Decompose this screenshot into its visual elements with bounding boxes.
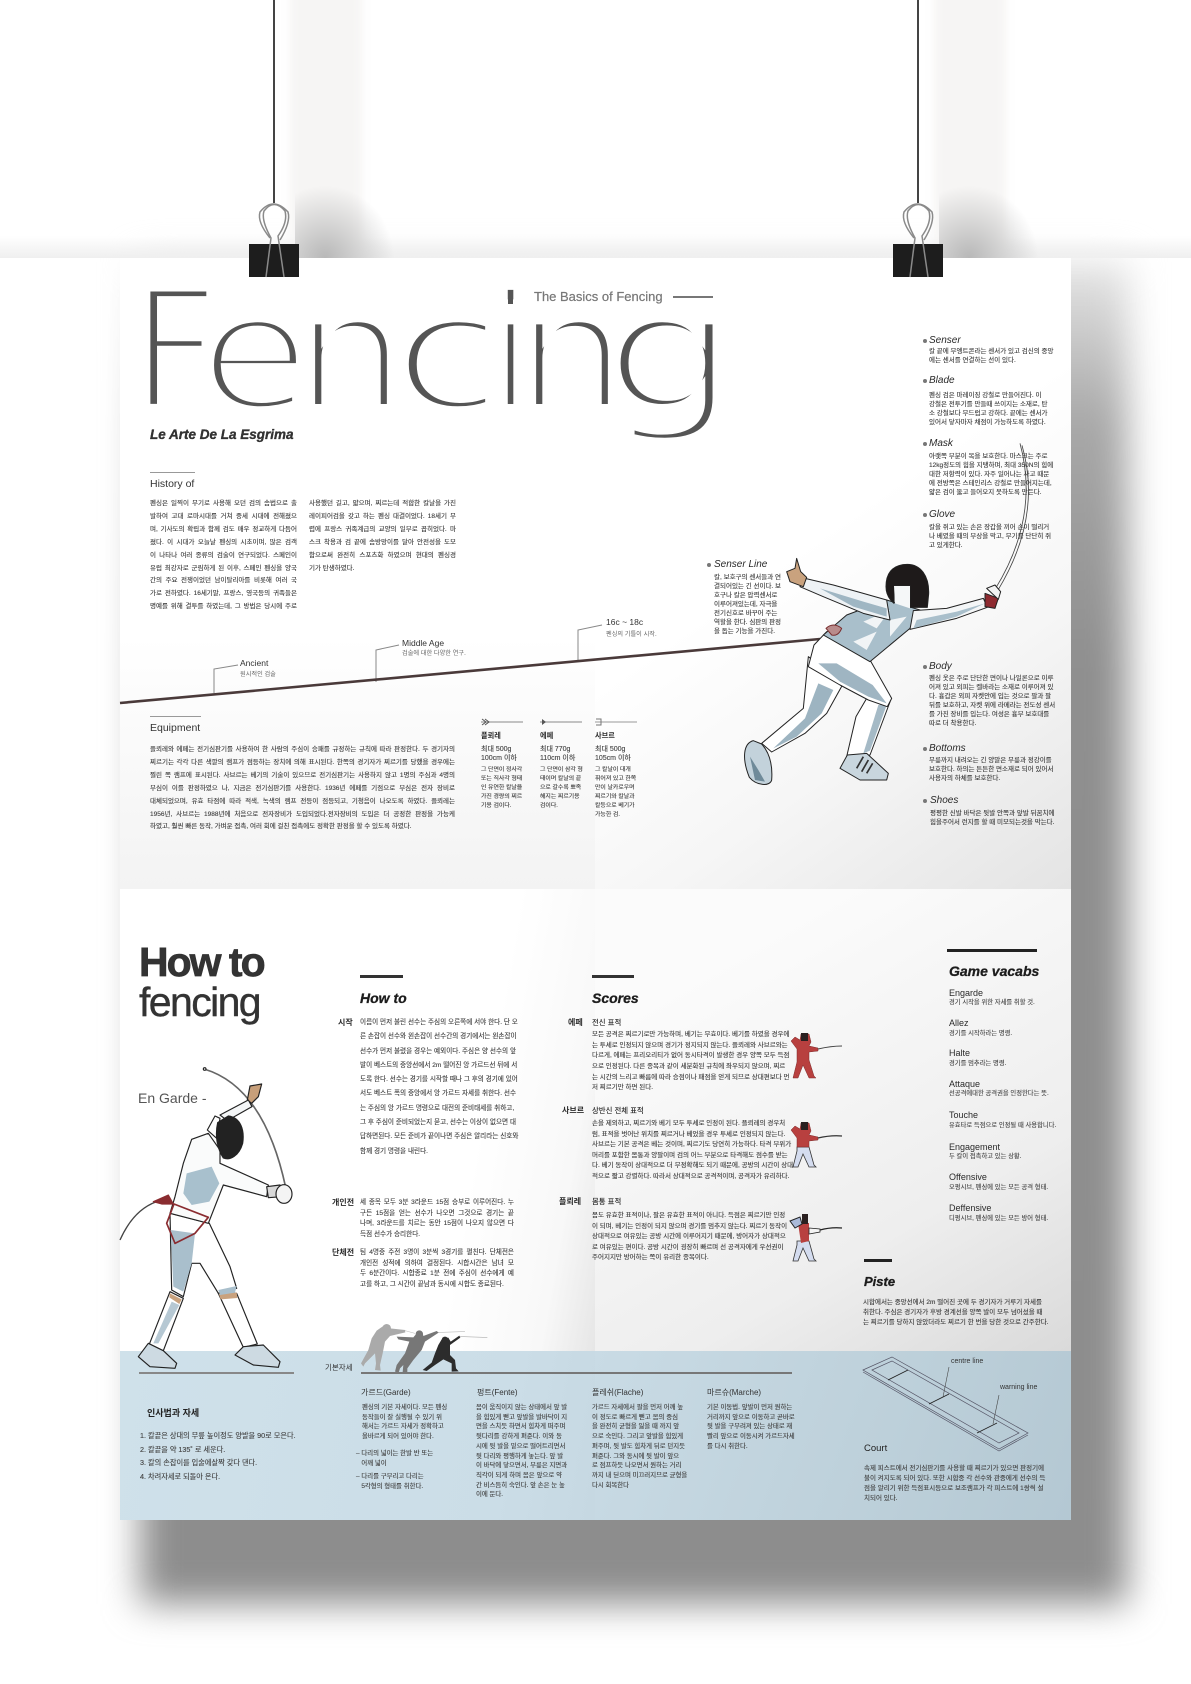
section: equipment: 찌르기는 각각 다른 색깔의 램프가 점등하는 장치에 의해 표시된다. 한쪽의 경기자가 찌르기를 당했을 경우에는	[150, 759, 455, 766]
stance: marche: 거리까지 앞으로 이동하고 곧바로	[707, 1414, 795, 1421]
equipment note: shoes	[923, 795, 1054, 826]
section: equipment: 하였고, 훨씬 빠른 동작, 가벼운 접촉, 여러 회에 걸친 접촉에도 정확한 판정을 할 수 있도록 하였다.	[150, 823, 412, 830]
section: history: 유럽 최강자로 군림하게 된 이후, 스페인 펜싱을 양국	[150, 565, 297, 572]
stance: fleche: 으로 숙인다. 그리고 앞발을 힘있게	[592, 1433, 683, 1440]
section: how to: 발이 베스트의 중앙선에서 2m 떨어진 앙 가르드선 뒤에 서	[360, 1062, 517, 1069]
equipment: foil	[481, 718, 523, 809]
equipment: sabre: 칼등으로 베기가	[595, 803, 635, 809]
equipment note: body: Body	[929, 661, 952, 672]
silhouettes: basic stances	[361, 1324, 488, 1372]
equipment note: senser: 에는 센서를 연결하는 선이 있다.	[929, 357, 1016, 364]
section: court	[864, 1443, 1046, 1502]
left arm	[800, 578, 890, 620]
equipment note: senser line: Senser Line	[714, 559, 767, 570]
fencer illustration: en garde	[119, 1067, 293, 1369]
section: piste: Piste	[864, 1274, 895, 1289]
stance: fente	[476, 1388, 567, 1498]
section: history	[150, 472, 456, 610]
timeline label: 16c-18c	[606, 617, 657, 638]
section: game vocabulary: Touche	[949, 1110, 978, 1120]
equipment: foil: 그 단면이 정사각	[481, 767, 522, 773]
stance: garde: 5각형의 형태를 취한다.	[361, 1483, 423, 1490]
section: how to: How to	[360, 990, 407, 1006]
hanging string right	[917, 0, 919, 203]
section: court: 치되어 있다.	[864, 1495, 898, 1502]
title: Fencing	[131, 254, 738, 448]
section: scores: 로 여유있는 편이다. 공방 시간이 굉장히 빠르며 선 공격자에게 우선권이	[592, 1244, 783, 1250]
stance: fente: 시에 뒷 발을 밑으로 떨어트리면서	[476, 1443, 565, 1450]
stance: fente: 뒷다리를 강하게 펴준다. 이와 동	[476, 1433, 562, 1440]
equipment note: senser: Senser	[929, 335, 961, 346]
stance: fleche: 펴주며, 뒷 발도 힘차게 뒤로 던지듯	[592, 1443, 685, 1450]
section: scores: 주어지지만 방어하는 쪽이 유리한 종목이다.	[592, 1254, 709, 1261]
equipment: sabre	[595, 718, 637, 818]
equipment: epee	[540, 719, 583, 809]
front shin	[847, 698, 891, 757]
stance: garde: 가르드(Garde)	[361, 1388, 411, 1397]
equipment: foil: 100cm 이하	[481, 755, 517, 762]
equipment note: blade: 펜싱 검은 마레이징 강철로 만들어진다. 이	[929, 392, 1042, 399]
piste court diagram	[862, 1356, 1028, 1452]
stance: fleche	[592, 1388, 687, 1489]
stance: fleche: 펴준다. 그와 동시에 뒷 발이 앞으	[592, 1453, 679, 1460]
thigh	[808, 632, 892, 707]
section: history: History of	[150, 478, 194, 490]
timeline label: middle age	[402, 638, 466, 657]
glove	[985, 593, 998, 608]
stance: garde: 펜싱의 기본 자세이다. 모든 펜싱	[362, 1404, 447, 1411]
equipment note: senser line	[707, 559, 781, 635]
tagline: Le Arte De La Esgrima	[150, 427, 294, 442]
section: scores: 이 되며, 베기는 인정이 되지 않으며 경기를 멈추지 않는다. 찌르기 동작이	[592, 1222, 787, 1230]
subtitle: The Basics of Fencing: The Basics of Fencing	[534, 289, 663, 304]
stance: fleche: 을 완전히 균형을 잃을 때 까지 앞	[592, 1423, 679, 1430]
section: equipment: 대체되었으며, 유효 타점에 따라 적색, 녹색의 램프 전등이 점등되고, 기청음이 나오도록 하였다. 플뢰레는	[150, 798, 455, 805]
title: Fencing: c	[392, 259, 503, 447]
hand	[787, 558, 807, 587]
stance: fleche: 로 점프하듯 나오면서 원하는 거리	[592, 1462, 681, 1469]
section: game vocabulary: Halte	[949, 1048, 970, 1058]
section: history: 가로 전하였다. 16세기말, 프랑스, 영국등의 귀족들은	[150, 590, 297, 597]
section: history: 간의 주요 전쟁이었던 남이탈리아를 비롯해 여러 국	[150, 577, 297, 584]
section: court: Court	[864, 1443, 887, 1454]
timeline label: middle age: Middle Age	[402, 638, 444, 648]
section: game vocabulary: 디펑시브, 펜싱에 있는 모든 방어 형태.	[949, 1215, 1048, 1222]
equipment note: senser line: 칼, 보호구의 센서들과 연	[714, 574, 781, 581]
section: game vocabulary: 경기 시작을 위한 자세를 취할 것.	[949, 999, 1035, 1006]
stance: fente: 뒷 다리와 평행하게 놓는다. 앞 발	[476, 1453, 563, 1460]
section: scores: 상대적으로 여유있는 공방 시간에 이루어지기 때문에, 방어자가 상대적으	[592, 1233, 786, 1240]
section: history: 사용했던 길고, 얇으며, 찌르는데 적합한 칼날을 가진	[309, 500, 456, 507]
small fencer: epee target	[790, 1033, 842, 1078]
section: how to: 개인전 성적에 의하여 결정된다. 시합시간은 남녀 모	[360, 1260, 514, 1266]
poster background panels	[120, 258, 1071, 1520]
equipment note: senser: 칼 끝에 무엥트콘라는 센서가 있고 검신의 중앙	[929, 348, 1053, 355]
section: equipment: 부심이 이를 판정하였으 나, 지금은 전기심판기를 사용한다. 1936년 에페를 기점으로 부심은 전자 장비로	[150, 785, 455, 792]
greeting and posture: 2. 칼끝을 약 135˚ 로 세운다.	[140, 1445, 225, 1454]
section: game vocabulary: Offensive	[949, 1172, 987, 1182]
stance: fleche: 까지 내 딛으며 미끄러지므로 균형을	[592, 1472, 687, 1479]
back foot	[745, 741, 772, 784]
equipment: epee: 태이며 칼날의 끝	[540, 776, 581, 782]
section: scores: 전신 표적	[592, 1018, 621, 1027]
title: Fencing: i	[488, 260, 533, 448]
equipment: epee: 최대 770g	[540, 746, 570, 753]
stance: fente: 간 비스듬히 숙인다. 앞 손은 눈 높	[476, 1482, 565, 1489]
stance: fente: 면을 스치듯 하면서 힘차게 떠주며	[476, 1423, 565, 1430]
section: how to: 선수가 먼저 불렸을 경우는 예외이다. 주심은 양 선수의 앞	[360, 1048, 516, 1055]
equipment note: blade: 소 강철보다 무드럽고 강하다. 끝에는 센서가	[929, 410, 1047, 417]
section: scores	[559, 975, 793, 1261]
stance: fente: 몸이 움직이지 않는 상태에서 앞 발	[476, 1404, 567, 1411]
stance: marche: 마르슈(Marche)	[707, 1388, 761, 1397]
timeline label: 16c-18c: 16c ~ 18c	[606, 617, 643, 627]
label: centre line: centre line	[951, 1358, 983, 1365]
equipment note: shoes: Shoes	[930, 795, 958, 806]
equipment: foil: 플뢰레	[481, 731, 501, 740]
stance: fente: 펑트(Fente)	[477, 1388, 518, 1397]
equipment note: senser line: 결되어있는 긴 선이다. 보	[714, 583, 781, 590]
title: Fencing: F	[131, 254, 220, 448]
section: scores: 상반신 전체 표적	[592, 1106, 644, 1115]
equipment note: body	[923, 661, 1055, 727]
label: basic stances: 기본자세	[325, 1363, 353, 1372]
stance: fente: 직각이 되게 하며 몸은 앞으로 약	[476, 1472, 562, 1479]
section: how to	[332, 975, 518, 1288]
equipment note: mask: 아랫쪽 부분이 목을 보호한다. 마스크는 주로	[929, 453, 1047, 460]
section: scores: 사브르는 기본 공격은 베는 것이며, 찌르기도 당연히 가능하다. 타격 부위가	[592, 1141, 791, 1148]
equipment: foil: 또는 직사각 형태	[481, 776, 522, 782]
equipment: sabre: 휘어져 있고 한쪽	[595, 776, 636, 782]
section: history: 발하여 고대 로마시대를 거쳐 중세 시대에 전해졌으	[150, 513, 297, 520]
section: scores: 손을 제외하고, 찌르기와 베기 모두 투셰로 인정이 된다. 플뢰레의 경우처	[592, 1120, 785, 1127]
poster shadow	[140, 262, 1128, 1604]
equipment: sabre: 찌르기와 칼날과	[595, 794, 635, 800]
section: how to: 그 후 주심이 준비되었는지 묻고, 선수는 이상이 없으면 대	[360, 1119, 516, 1126]
mask	[886, 564, 929, 607]
timeline label: ancient: 원시적인 검술	[240, 671, 276, 678]
stance: marche: 기본 이동법. 앞발이 먼저 원하는	[707, 1404, 792, 1411]
section: scores: 머리를 포함한 몸통과 양팔이며 검의 어느 부분으로 타격해도 점수를 받는	[592, 1152, 788, 1159]
section: game vocabulary: Engarde	[949, 988, 983, 998]
heading: How to fencing: fencing	[139, 979, 260, 1025]
equipment note: shoes: 힘을주어서 런지를 할 때 미모되는것을 막는다.	[930, 819, 1054, 826]
hanging shadow left	[290, 0, 362, 258]
fencer illustration: lunge	[744, 443, 1029, 785]
section: equipment: 1956년, 사브르는 1988년에 처음으로 전자장비가 도입되었다.전자장비의 도입은 더 공정한 판정을 가능케	[150, 811, 455, 818]
hanging string left	[273, 0, 275, 203]
equipment: sabre: 105cm 이하	[595, 755, 631, 762]
section: how to: 도록 한다. 선수는 경기를 시작할 때나 그 후의 경기에 있어	[360, 1076, 518, 1083]
stance: garde: 어깨 넓이	[361, 1460, 387, 1467]
section: history: 레이피어검을 갖고 하는 펜싱 대결이었다. 18세기 무	[309, 513, 456, 520]
section: how to: 두 6분간이다. 시합종료 1분 전에 주심이 선수에게 예	[360, 1270, 514, 1277]
section: how to: 이름이 먼저 불린 선수는 주심의 오른쪽에 서야 한다. 단 오	[360, 1019, 518, 1026]
section: how to: 구든 15점을 얻는 선수가 나오면 그것으로 경기는 끝	[360, 1210, 514, 1217]
section: how to: 세 종목 모두 3분 3라운드 15점 승부로 이루어진다. 누	[360, 1199, 514, 1206]
section: how to: 팀 4명중 주전 3명이 3분씩 3경기를 펼친다. 단체전은	[360, 1249, 514, 1256]
section: scores: 다. 베기 동작이 상대적으로 더 무정확해도 되기 때문에, 공방의 시간이 상대	[592, 1162, 793, 1169]
equipment note: mask: 12kg정도의 힘을 지탱하며, 최대 350N의 힘에	[929, 462, 1053, 469]
section: history: 스크 착용과 검 끝에 솜방망이를 달아 안전성을 도모	[309, 539, 456, 546]
equipment note: senser	[923, 335, 1054, 364]
section: game vocabulary: 경기를 멈추라는 명령.	[949, 1060, 1006, 1067]
section: game vocabulary: Game vacabs	[949, 963, 1039, 979]
section: piste: 는 찌르기를 당하지 않았더라도 찌르기 한 번을 당한 것으로 간주한다.	[863, 1319, 1048, 1326]
section: court: 불이 켜지도록 되어 있다. 또한 시합중 각 선수와 관중에게 선수의 득	[864, 1475, 1045, 1482]
equipment note: bottoms	[923, 743, 1053, 782]
small fencer: sabre target	[790, 1122, 842, 1168]
section: history: 렵에 프랑스 귀족계급의 교양의 일부로 꼽히었다. 마	[309, 526, 456, 533]
equipment note: body: 따로 더 착용한다.	[929, 720, 976, 727]
section: how to: 개인전	[332, 1198, 354, 1207]
section: equipment: 플뢰레와 에페는 전기심판기를 사용하여 한 사람의 주심이 승패를 규정하는 규칙에 따라 판정한다. 두 경기자의	[150, 746, 455, 753]
section: how to: 고를 하고, 그 시간이 끝남과 동시에 시합도 종료된다.	[360, 1280, 504, 1288]
equipment note: senser line: 호구나 칼은 압력센서로	[714, 592, 777, 599]
heading: How to fencing: How to	[139, 939, 264, 985]
section: game vocabulary: 경기를 시작하라는 명령.	[949, 1030, 1012, 1037]
binder clip left	[249, 203, 299, 278]
equipment note: bottoms: 보호한다. 하의는 튼튼한 면소재로 되어 있어서	[929, 766, 1053, 773]
timeline label: ancient: Ancient	[240, 658, 268, 668]
connector	[826, 625, 842, 635]
equipment: epee: 해지는 찌르기용	[540, 794, 580, 800]
stance: garde: 해서는 가르드 자세가 정확하고	[362, 1423, 444, 1430]
equipment note: bottoms: 사용자의 하체를 보호한다.	[929, 775, 1000, 782]
equipment: sabre: 가능한 검.	[595, 812, 620, 818]
section: history: 졌다. 이 시대가 오늘날 펜싱의 시초이며, 많은 검객	[150, 539, 297, 546]
section: equipment: Equipment	[150, 722, 200, 734]
stance: fente: 이 바닥에 닿으면서, 무릎은 지면과	[476, 1462, 567, 1469]
section: game vocabulary: Attaque	[949, 1079, 980, 1089]
label: warning line: warning line	[1000, 1384, 1037, 1391]
ground line	[139, 1372, 294, 1374]
section: history: 함으로써 완전히 스포츠화 하였으며 현대의 펜싱경	[309, 552, 456, 559]
title: Fencing: g	[603, 258, 738, 447]
stance: fleche: 가르드 자세에서 팔을 먼저 어깨 높	[592, 1404, 683, 1411]
section: equipment	[150, 716, 455, 830]
equipment: sabre: 최대 500g	[595, 746, 625, 753]
stance: marche: 를 다시 취한다.	[707, 1443, 748, 1450]
section: scores: 다르게, 에페는 프리오리티가 없어 동시타격이 발생한 경우 양쪽 모두 득점	[592, 1052, 789, 1059]
section: scores: 는 투셰로 인정되지 않으며 경기가 정지되지 않는다. 플뢰레와 사브르와는	[592, 1042, 788, 1049]
section: scores: 사브르	[562, 1106, 584, 1115]
jacket	[823, 600, 920, 662]
equipment note: mask: 에 전방쪽은 스테인리스 강철로 만들어지는데,	[929, 480, 1052, 487]
equipment: epee: 110cm 이하	[540, 755, 575, 762]
equipment note: glove: 고 있게한다.	[929, 542, 963, 549]
section: how to: 시작	[338, 1018, 353, 1027]
section: how to: 는 주심의 앙 가르드 명령으로 대전의 준비태세를 취하고,	[360, 1105, 514, 1112]
stance: fente: 을 힘있게 뻗고 앞발을 발바닥이 지	[476, 1414, 567, 1421]
section: piste: 취한다. 주심은 경기자가 후방 경계선을 양쪽 발이 모두 넘어섰을 때	[863, 1309, 1043, 1316]
front foot	[840, 753, 888, 780]
section: court: 속제 피스트에서 전기심판기를 사용할 때 찌르기가 있으면 판정기에	[864, 1465, 1044, 1472]
equipment: sabre: 만이 날카로우며	[595, 785, 635, 791]
equipment note: senser line: 이루어져있는데, 자극을	[714, 601, 777, 608]
section: game vocabulary: 유효타로 득점으로 인정될 때 사용합니다.	[949, 1122, 1056, 1129]
title: Fencing: e	[199, 258, 311, 447]
timeline	[120, 624, 820, 704]
stance: marche	[707, 1388, 795, 1450]
equipment note: body: 를 가진 장비를 입는다. 여성은 흉부 보호대를	[929, 711, 1049, 718]
equipment note: glove	[923, 509, 1051, 549]
equipment: epee: 에페	[540, 731, 553, 740]
section: scores: 는 시간의 느리고 빠름에 따라 승점이나 패점을 얻게 되므로 상대편보다 먼	[592, 1074, 789, 1081]
equipment note: mask: 대한 저항력이 있다. 자주 일어나는 사고 때문	[929, 471, 1049, 478]
basic stance rule	[361, 1372, 792, 1374]
title: Fencing: n	[294, 259, 407, 448]
equipment note: blade: Blade	[929, 375, 955, 386]
stance: garde: – 다리를 구부리고 다리는	[356, 1473, 424, 1480]
stance: garde: – 다리의 넓이는 한발 반 또는	[356, 1450, 433, 1457]
section: history: 이 나타나 여러 종류의 검술이 연구되었다. 스페인이	[150, 552, 297, 559]
blade	[995, 443, 1029, 591]
equipment: epee: 그 단면이 삼각 형	[540, 767, 583, 773]
greeting and posture: 인사법과 자세	[147, 1408, 199, 1418]
section: how to: 단체전	[332, 1248, 354, 1257]
section: game vocabulary: 오펑시브, 펜싱에 있는 모든 공격 형태.	[949, 1184, 1048, 1191]
section: how to: 답하면된다. 모든 준비가 끝이나면 주심은 알리라는 신호와	[360, 1133, 518, 1140]
section: scores: 모든 공격은 찌르기로만 가능하며, 베기는 무효이다. 베기를 하였을 경우에	[592, 1031, 789, 1038]
timeline label: 16c-18c: 펜싱의 기틀이 시작.	[606, 631, 657, 638]
greeting and posture: 3. 칼의 손잡이를 입술에살짝 갖다 댄다.	[140, 1458, 257, 1467]
equipment note: body: 어져 있고 외피는 켈바라는 소재로 이루어져 있	[929, 684, 1053, 691]
stance: marche: 빨리 앞으로 이동시켜 가르드자세	[707, 1433, 795, 1440]
section: how to: 득점 선수가 승리한다.	[360, 1231, 420, 1238]
equipment note: senser line: 역할을 한다. 심판의 판정	[714, 619, 781, 626]
section: game vocabulary: Engagement	[949, 1142, 1000, 1152]
top edge shadow	[0, 236, 1191, 258]
section: how to: 함께 경기 명령을 내린다.	[360, 1148, 428, 1155]
section: scores: 몸도 유효한 표적이나, 팔은 유효한 표적이 아니다. 득점은 찌르기만 인정	[592, 1212, 785, 1219]
equipment note: bottoms: 무릎까지 내려오는 긴 양말은 무릎과 정강이를	[929, 757, 1052, 764]
section: piste: 시합에서는 중앙선에서 2m 떨어진 곳에 두 경기자가 거루기 자세를	[863, 1299, 1042, 1306]
section: how to: 서도 베스트 폭의 중앙에서 앙 가르드 자세를 취한다. 선수	[360, 1090, 516, 1097]
equipment note: glove: Glove	[929, 509, 955, 520]
stance: garde: 올바르게 되어 있어야 한다.	[362, 1433, 434, 1440]
equipment note: bottoms: Bottoms	[929, 743, 966, 754]
equipment: epee: 검이다.	[540, 803, 558, 809]
title: Fencing: n	[515, 259, 628, 448]
equipment: sabre: 사브르	[595, 731, 615, 740]
section: piste	[863, 1259, 1048, 1326]
section: scores: Scores	[592, 990, 639, 1006]
section: equipment: 찔린 쪽 램프에 표시된다. 사브르는 베기의 기술이 있으므로 전기심판기는 사용하지 않고 1명의 주심과 4명의	[150, 772, 455, 779]
timeline label: middle age: 검술에 대한 다양한 연구.	[402, 650, 466, 657]
equipment note: blade	[923, 375, 1048, 426]
stance: fente: 이에 둔다.	[476, 1491, 503, 1498]
equipment note: body: 펜싱 옷은 주로 단단한 면이나 나일론으로 이루	[929, 675, 1053, 682]
section: scores: 몸통 표적	[592, 1197, 621, 1206]
back leg	[762, 657, 843, 752]
equipment note: shoes: 평평한 신발 바닥은 뒷발 안쪽과 앞발 뒤꿈치에	[930, 810, 1054, 817]
section: scores: 적으로 짧고 강렬하다. 따라서 상대적으로 공격적이며, 공격자가 유리하다.	[592, 1173, 789, 1180]
section: history: 며, 기사도의 확립과 함께 검도 매우 정교하게 다듬어	[150, 526, 297, 533]
equipment note: glove: 나 베였을 때의 부상을 막고, 무기를 단단히 쥐	[929, 533, 1051, 540]
stance: fleche: 플레쉬(Flache)	[592, 1388, 643, 1397]
stance: marche: 뒷 발을 구부려져 있는 상태로 재	[707, 1423, 792, 1430]
stance: fleche: 이 정도로 빠르게 뻗고 몸의 중심	[592, 1414, 678, 1421]
equipment note: senser line: 전기신호로 바꾸어 주는	[714, 610, 777, 617]
equipment: foil: 인 유연한 칼날을	[481, 785, 522, 791]
section: game vocabulary: Allez	[949, 1018, 969, 1028]
equipment note: body: 뒤를 보호하고, 자켓 위에 라메라는 전도성 센서	[929, 702, 1055, 709]
stance: garde: 동작들이 잘 실행될 수 있기 위	[362, 1414, 442, 1421]
section: game vocabulary: Deffensive	[949, 1203, 991, 1213]
right arm	[910, 598, 987, 629]
binder clip right	[893, 203, 943, 278]
section: scores: 플뢰레	[559, 1197, 581, 1206]
equipment: sabre: 그 칼날이 대개	[595, 767, 631, 773]
equipment: foil: 가진 경량의 찌르	[481, 794, 522, 800]
section: game vocabulary: 두 칼이 접촉하고 있는 상황.	[949, 1153, 1021, 1160]
label: En Garde: En Garde -	[138, 1090, 206, 1106]
equipment note: mask: 얇은 검이 뚫고 들어오지 못하도록 만든다.	[929, 489, 1042, 496]
section: history: 명예를 위해 결투를 하였는데, 그 방법은 당시에 주로	[150, 603, 297, 610]
section: how to: 나며, 3라운드를 치르는 동안 15점이 나오지 않으면 다	[360, 1220, 514, 1227]
equipment note: mask	[923, 438, 1053, 496]
small fencer: foil target	[789, 1214, 842, 1262]
section: history: 기가 탄생하였다.	[309, 565, 354, 572]
equipment note: body: 다. 흉갑은 외피 자켓안에 입는 것으로 팔과 팔	[929, 693, 1051, 700]
hanging shadow right	[934, 0, 1006, 258]
section: scores: 럼, 표적을 벗어난 위치를 찌르거나 베었을 경우 투셰로 인정되지 않는다.	[592, 1131, 785, 1138]
timeline label: ancient	[240, 658, 276, 678]
section: game vocabulary	[947, 949, 1056, 1222]
equipment: foil: 기용 검이다.	[481, 803, 511, 809]
equipment note: senser line: 을 돕는 기능을 가진다.	[714, 628, 775, 635]
section: scores: 에페	[568, 1018, 583, 1027]
section: how to: 른 손잡이 선수와 왼손잡이 선수간의 경기에서는 왼손잡이	[360, 1033, 517, 1040]
equipment: epee: 으로 갈수록 뾰족	[540, 785, 581, 791]
equipment note: blade: 강철은 전투기를 만들때 쓰이지는 소재로, 탄	[929, 401, 1047, 408]
section: history: 펜싱은 일찍이 무기로 사용해 오던 검의 솜법으로 출	[150, 500, 297, 507]
greeting and posture	[140, 1408, 296, 1481]
greeting and posture: 4. 차려자세로 되돌아 온다.	[140, 1472, 220, 1481]
equipment note: glove: 칼을 쥐고 있는 손은 장갑을 끼어 손이 떨리거	[929, 524, 1049, 531]
section: game vocabulary: 선공격에대한 공격권을 인정한다는 뜻.	[949, 1090, 1049, 1097]
greeting and posture: 1. 칼끝은 상대의 무릎 높이정도 양발을 90로 모은다.	[140, 1431, 296, 1440]
stance: garde	[356, 1388, 447, 1490]
equipment: foil: 최대 500g	[481, 746, 511, 753]
equipment note: mask: Mask	[929, 438, 953, 449]
section: court: 점을 알리기 위한 득점표시등으로 보조램프가 각 피스트에 1쌍씩 설	[864, 1485, 1044, 1492]
section: scores: 저 찌르기만 하면 된다.	[592, 1084, 653, 1091]
equipment note: blade: 있어서 닿자마자 채점이 가능하도록 하였다.	[929, 419, 1046, 426]
section: scores: 으로 인정된다. 다른 종목과 같이 세분화된 규칙에 좌우되지 않으며, 찌르	[592, 1063, 785, 1070]
stance: fleche: 다시 회복한다	[592, 1482, 629, 1489]
heading: How to fencing	[139, 939, 264, 1025]
